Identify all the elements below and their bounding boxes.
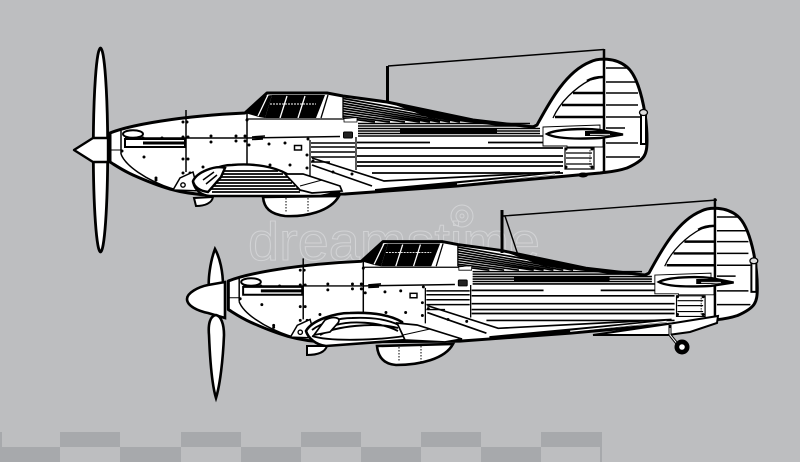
watermark: dreamstime [248, 212, 540, 272]
radiator scoop [307, 346, 327, 355]
propeller blade [93, 48, 108, 252]
aircraft: lower side view [187, 198, 758, 398]
radiator scoop [194, 197, 213, 206]
lower propeller blade [209, 315, 224, 398]
tail wheel fairing [578, 172, 588, 178]
aerial wire and brace [503, 200, 717, 255]
under-wing tank [263, 196, 339, 216]
belly tail fairing [593, 316, 718, 335]
radio mast [500, 210, 504, 253]
tail wheel [670, 325, 690, 354]
spinner [187, 282, 225, 318]
aircraft: upper side view [74, 48, 648, 252]
fuselage and tail [110, 49, 648, 195]
fuselage and tail [228, 198, 758, 342]
radiator [306, 313, 462, 346]
upper propeller blade [209, 249, 223, 296]
under-wing tank [377, 344, 453, 365]
radiator [193, 164, 342, 196]
checkered ground strip [0, 432, 602, 462]
aerial wire [388, 50, 604, 66]
spinner [74, 138, 108, 162]
radio mast [386, 66, 389, 102]
